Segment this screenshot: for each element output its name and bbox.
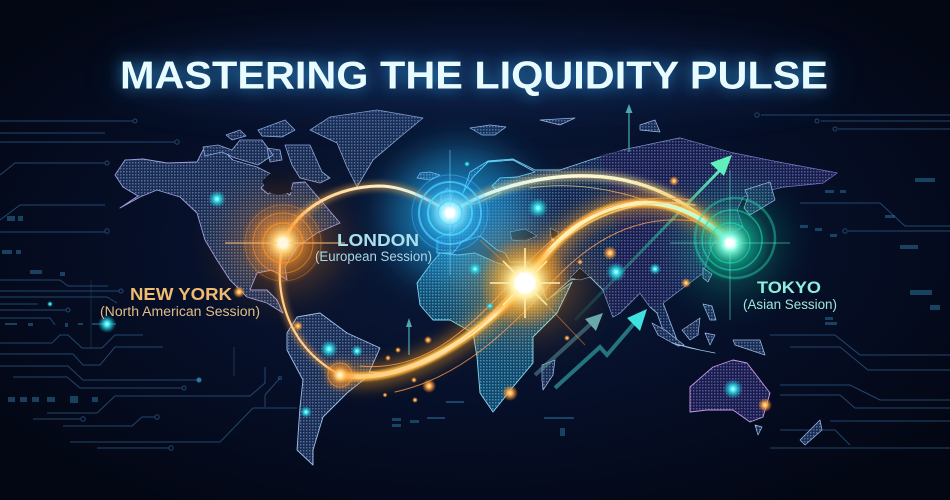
continent: Africa xyxy=(417,253,572,412)
arc: South America through hub to Tokyo xyxy=(340,198,730,392)
label: Tokyo xyxy=(743,278,837,312)
data ticks: edges xyxy=(2,178,940,436)
market activity points xyxy=(47,161,772,418)
arc: New York to London xyxy=(283,186,450,243)
world map xyxy=(115,110,837,465)
label: London: (European Session) xyxy=(315,249,432,264)
growth arrow: teal zigzag xyxy=(555,309,647,388)
label: London xyxy=(315,230,432,264)
liquidity arcs xyxy=(280,176,730,392)
growth arrow: gray-teal xyxy=(535,313,603,375)
arc: New York to South America xyxy=(280,243,340,375)
arc: London to Tokyo xyxy=(450,176,730,243)
continent: Greenland xyxy=(310,110,423,187)
label: London: LONDON xyxy=(337,230,419,250)
islands: Asia Pacific xyxy=(417,118,822,445)
node: central burst xyxy=(470,237,585,345)
continent: Eurasia xyxy=(437,138,837,340)
node: London xyxy=(408,150,492,275)
circuit lines: left xyxy=(0,119,297,450)
node: South America xyxy=(323,358,357,392)
continent: Arctic islands xyxy=(203,120,330,183)
label: New York: (North American Session) xyxy=(100,304,260,319)
sea: Hudson Bay xyxy=(262,172,292,195)
ambient glow xyxy=(114,42,834,333)
label: New York: NEW YORK xyxy=(130,284,232,304)
node: New York xyxy=(225,201,345,285)
overlay: Asia tone xyxy=(600,138,837,317)
growth arrow: green upward xyxy=(575,155,732,320)
circuit lines: right xyxy=(755,113,950,448)
continent: North America xyxy=(115,150,340,313)
continent: Australia xyxy=(690,360,770,422)
vertical arrow: upper xyxy=(626,104,632,152)
title: MASTERING THE LIQUIDITY PULSE xyxy=(120,54,828,98)
title: MASTERING THE LIQUIDITY PULSE xyxy=(120,54,828,98)
node: Tokyo xyxy=(670,170,790,320)
label: Tokyo: (Asian Session) xyxy=(743,297,837,312)
label: Tokyo: TOKYO xyxy=(757,278,821,297)
seas: Black Sea, Caspian, Gulf xyxy=(510,228,590,280)
vertical arrow: lower xyxy=(406,318,412,355)
continent: South America xyxy=(287,313,380,465)
label: New York xyxy=(100,284,260,319)
